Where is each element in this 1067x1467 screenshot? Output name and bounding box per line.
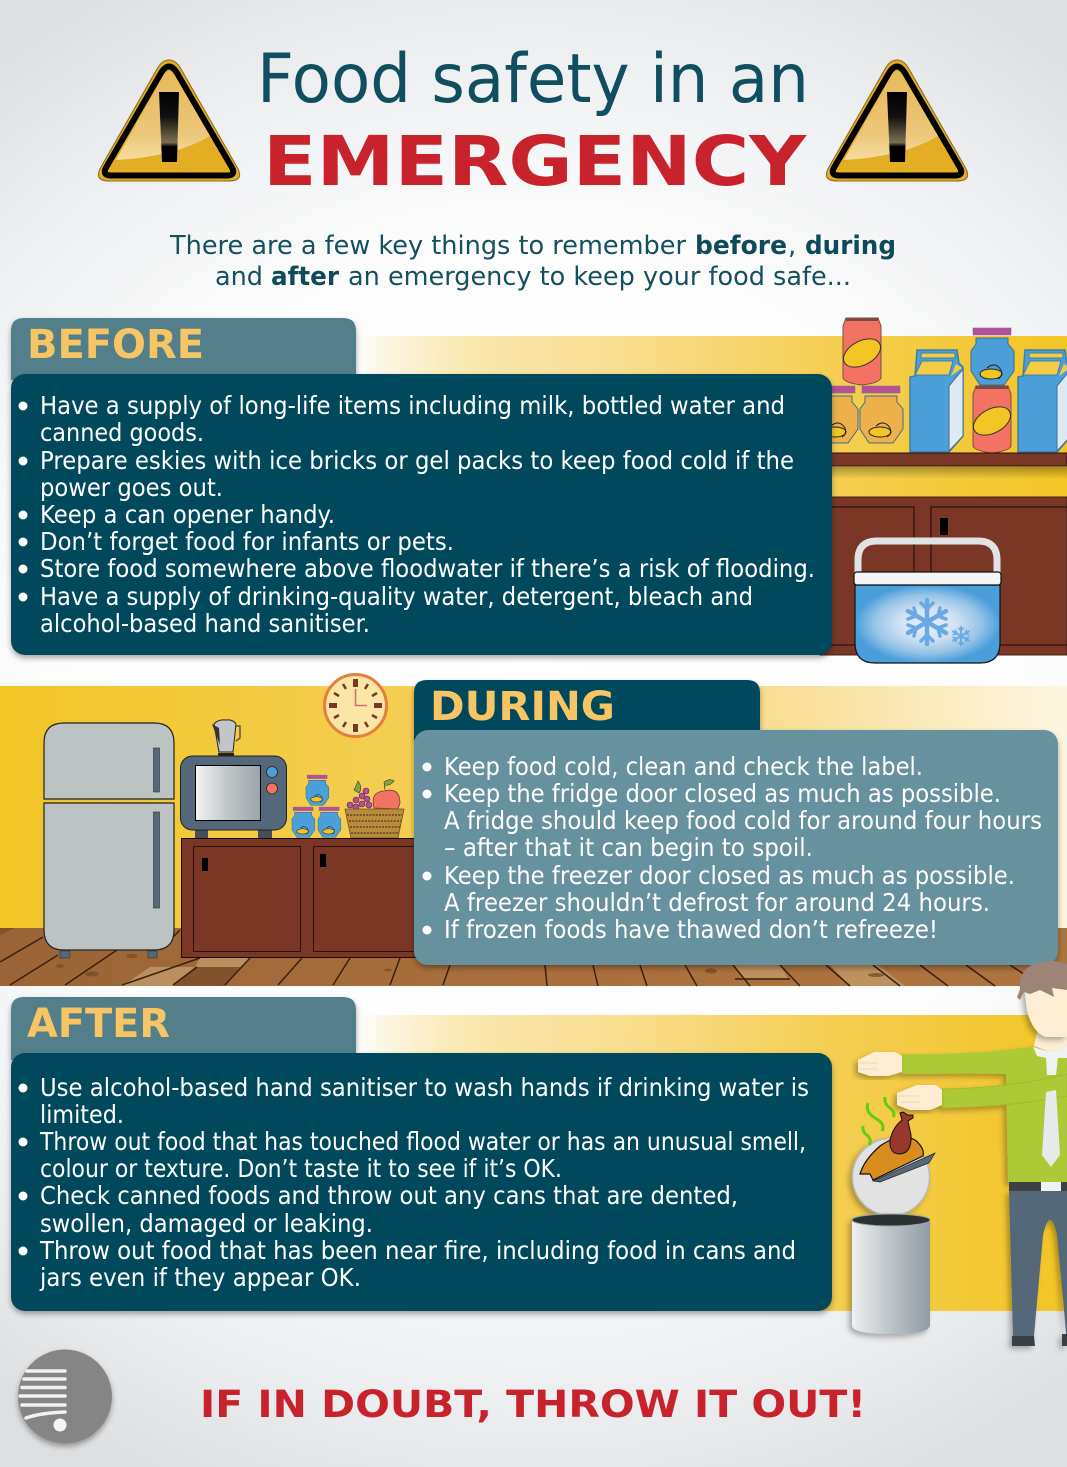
jar blue: [971, 328, 1014, 385]
text: after list: jars even if they appear OK.: [39, 1263, 361, 1292]
carton left: [910, 350, 963, 452]
text: during list: If frozen foods have thawed don’t refreeze!: [444, 915, 938, 944]
icon: stacked jars: [292, 775, 341, 837]
icon: bin lid: [852, 1138, 930, 1216]
illustration: kitchen shelf and cabinet: [815, 318, 1067, 655]
icon: bin: [852, 1214, 930, 1334]
bullets: after: [18, 1084, 28, 1256]
text: before list: Keep a can opener handy.: [40, 500, 335, 529]
intro text: during: [805, 231, 896, 261]
shirt: [902, 1046, 1067, 1183]
hand lower: [897, 1085, 942, 1110]
panel: before: [11, 374, 832, 655]
heading tab: after: [11, 997, 356, 1060]
text: after list: Throw out food that has touched flood water or has an unusual smell,: [39, 1127, 806, 1156]
text: before list: power goes out.: [40, 473, 223, 502]
text: during list: [444, 752, 1042, 944]
wall band: during: [0, 686, 1067, 929]
icon: blender: [212, 720, 240, 756]
logo: grey roundel: [18, 1350, 112, 1444]
text: before list: Have a supply of drinking-quality water, detergent, bleach and: [40, 582, 753, 611]
wood floor: [0, 928, 1067, 986]
text: during list: A freezer shouldn’t defrost for around 24 hours.: [444, 888, 990, 917]
text: after list: swollen, damaged or leaking.: [40, 1209, 373, 1238]
text: during list: Keep the freezer door closed as much as possible.: [444, 861, 1015, 890]
intro text: [169, 231, 896, 292]
title: [257, 40, 809, 202]
jars orange: [815, 386, 903, 443]
title: Food safety in an: [257, 40, 809, 119]
icon: wall clock: [324, 674, 386, 736]
intro text: There are a few key things to remember: [169, 231, 686, 261]
text: during list: Keep the fridge door closed as much as possible.: [444, 779, 1001, 808]
text: before list: Prepare eskies with ice bricks or gel packs to keep food cold if the: [40, 446, 794, 475]
intro text: before: [695, 231, 787, 261]
icon: cool box: [854, 541, 1001, 663]
text: after list: limited.: [40, 1100, 124, 1129]
heading: during: DURING: [430, 684, 615, 730]
cabinet: [820, 497, 1067, 655]
icon: warning triangle right: [826, 60, 968, 181]
heading: after: AFTER: [27, 1001, 170, 1047]
text: before list: canned goods.: [40, 418, 204, 447]
bullets: before: [18, 402, 28, 602]
intro text: ,: [788, 231, 796, 261]
text: during list: Keep food cold, clean and check the label.: [444, 752, 923, 781]
icon: spoiled chicken on plate: [860, 1112, 935, 1182]
carton right: [1018, 350, 1067, 452]
text: during list: – after that it can begin to spoil.: [444, 833, 813, 862]
text: after list: Throw out food that has been near fire, including food in cans and: [39, 1236, 796, 1265]
text: after list: colour or texture. Don’t taste it to see if it’s OK.: [40, 1154, 562, 1183]
icon: smell lines: [863, 1097, 894, 1145]
bullets: during: [422, 762, 432, 934]
wall band: after: [357, 1015, 1067, 1311]
icon: warning triangle left: [98, 60, 240, 181]
can stacked right: [969, 386, 1015, 453]
text: after list: Check canned foods and throw out any cans that are dented,: [40, 1181, 738, 1210]
intro text: and: [215, 262, 263, 292]
wall band: before: [357, 336, 1067, 655]
head: [1017, 961, 1067, 1052]
text: before list: Don’t forget food for infants or pets.: [40, 527, 454, 556]
illustration: man throwing out food: [858, 961, 1067, 1346]
tie: [1033, 1046, 1067, 1167]
heading tab: during: [414, 680, 760, 740]
text: before list: alcohol-based hand sanitiser.: [40, 609, 370, 638]
intro text: an emergency to keep your food safe...: [348, 262, 851, 292]
heading: before: BEFORE: [27, 322, 204, 368]
panel: after: [11, 1053, 832, 1311]
trousers: [1009, 1190, 1067, 1346]
belt: [1009, 1182, 1067, 1191]
icon: microwave: [180, 756, 286, 838]
text: before list: Have a supply of long-life items including milk, bottled water and: [40, 391, 785, 420]
icon: fruit basket: [345, 780, 404, 838]
title: EMERGENCY: [263, 122, 807, 202]
text: after list: Use alcohol-based hand sanitiser to wash hands if drinking water is: [40, 1073, 809, 1102]
icon: fridge: [44, 723, 174, 958]
hand upper: [858, 1052, 902, 1076]
text: before list: [40, 391, 815, 638]
text: after list: [39, 1073, 809, 1292]
panel: during: [414, 730, 1058, 965]
shelf: [820, 453, 1067, 479]
can stacked left: [839, 318, 885, 385]
text: before list: Store food somewhere above floodwater if there’s a risk of flooding.: [40, 554, 815, 583]
cabinet: during: [182, 838, 425, 958]
intro text: after: [271, 262, 339, 292]
slogan: IF IN DOUBT, THROW IT OUT!: [200, 1383, 866, 1426]
heading tab: before: [11, 318, 356, 380]
